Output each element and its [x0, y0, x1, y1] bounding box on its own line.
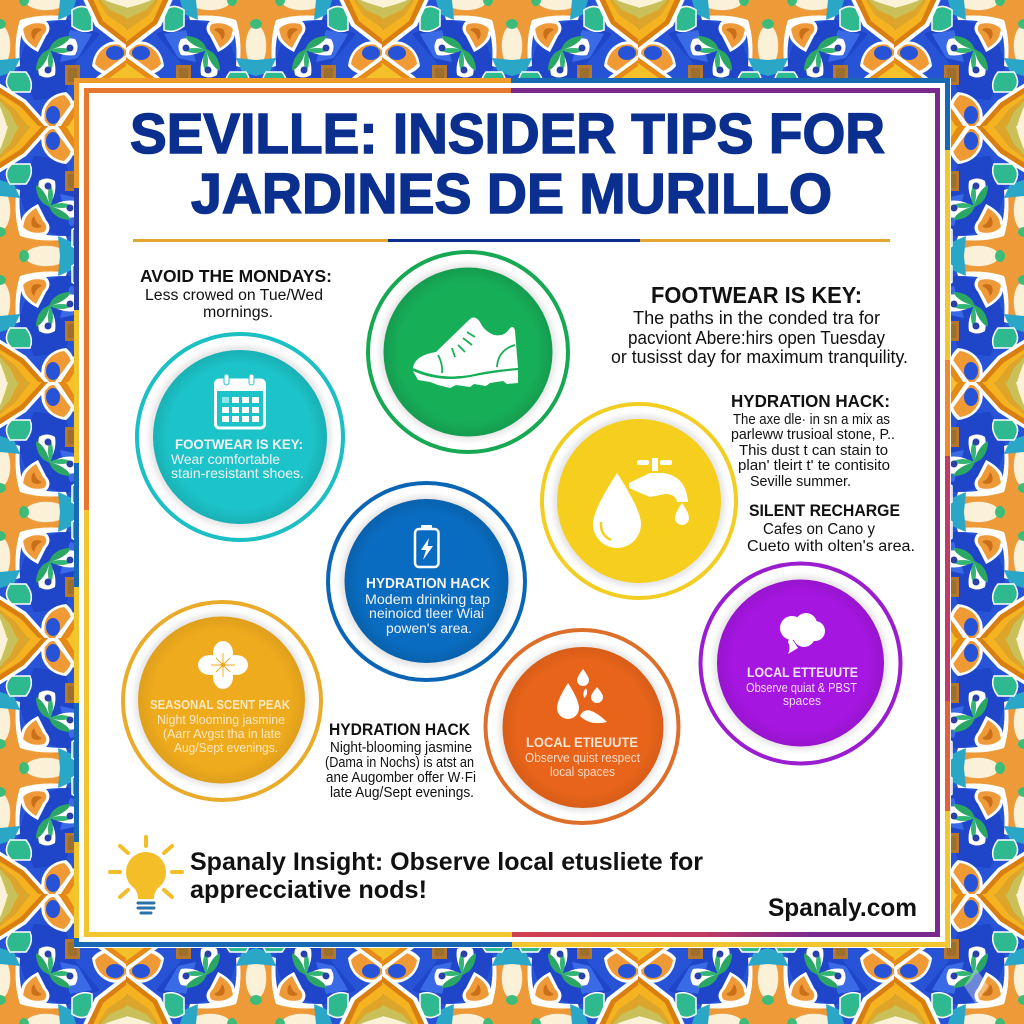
- circle: footwear teal: stain-resistant shoes.: [171, 465, 304, 481]
- circle: recharge blue: [328, 483, 525, 680]
- title: JARDINES DE MURILLO: [191, 162, 832, 226]
- icon: boot: [413, 318, 518, 388]
- text block: hydration hack right: The axe dle· in sn a mix as: [733, 412, 890, 428]
- text block: silent recharge: Cueto with olten's area.: [747, 538, 915, 555]
- circle: jasmine amber: SEASONAL SCENT PEAK: [150, 697, 291, 712]
- icon: speech bubble: [780, 613, 825, 654]
- text block: hydration hack lower: late Aug/Sept evenings.: [330, 785, 474, 801]
- circle: water yellow: [542, 404, 736, 598]
- circle: etiquette orange: local spaces: [550, 764, 615, 779]
- circle: etiquette purple: Observe quiat & PBST: [746, 680, 857, 695]
- circle: footwear teal: Wear comfortable: [171, 451, 280, 467]
- text block: silent recharge: Cafes on Cano y: [763, 521, 875, 538]
- text block: hydration hack lower: [325, 720, 476, 801]
- text block: avoid the mondays: AVOID THE MONDAYS:: [140, 266, 332, 286]
- circle: boot green: [368, 252, 568, 452]
- text block: hydration hack lower: Night-blooming jasmine: [330, 740, 472, 756]
- icon: jasmine flower: [198, 641, 248, 689]
- circle: recharge blue: powen's area.: [386, 620, 472, 636]
- text block: hydration hack right: parleww trusioal stone, P..: [731, 427, 895, 443]
- circle: etiquette orange: [486, 630, 678, 823]
- circle: etiquette purple: [700, 564, 900, 764]
- circle: jasmine amber: [123, 602, 321, 800]
- icon: light bulb: [110, 837, 182, 913]
- text block: footwear is key: [611, 282, 908, 367]
- text block: avoid the mondays: Less crowed on Tue/Wed: [145, 287, 323, 304]
- icon: battery: [415, 525, 438, 567]
- text block: hydration hack right: This dust t can stain to: [739, 443, 888, 459]
- icon: drops and leaf: [557, 669, 607, 723]
- text block: hydration hack right: plan' tleirt t' te contisito: [738, 458, 890, 474]
- text block: avoid the mondays: mornings.: [203, 304, 273, 321]
- text block: footwear is key: FOOTWEAR IS KEY:: [651, 282, 862, 308]
- title divider: [133, 239, 890, 242]
- circle: footwear teal: FOOTWEAR IS KEY:: [175, 436, 303, 452]
- title: SEVILLE: INSIDER TIPS FOR: [130, 102, 885, 166]
- icon: tap and drop: [593, 458, 689, 548]
- icon: calendar: [215, 374, 265, 428]
- circle: jasmine amber: Aug/Sept evenings.: [174, 740, 278, 755]
- insight text: [190, 848, 703, 904]
- circle: footwear teal: [137, 334, 343, 540]
- circle: etiquette orange: Observe quist respect: [525, 750, 640, 765]
- text block: footwear is key: or tusisst day for maximum tranquility.: [611, 347, 908, 367]
- circle: etiquette orange: LOCAL ETIEUUTE: [526, 734, 638, 750]
- text block: hydration hack right: HYDRATION HACK:: [731, 391, 890, 411]
- text block: hydration hack right: Seville summer.: [750, 474, 851, 490]
- text block: footwear is key: pacviont Abere:hirs open Tuesday: [628, 328, 885, 348]
- circle: jasmine amber: (Aarr Avgst tha in late: [163, 726, 281, 741]
- text block: silent recharge: [747, 501, 915, 555]
- insight text: Spanaly Insight: Observe local etusliete for: [190, 848, 703, 876]
- website: Spanaly.com: [768, 894, 917, 922]
- text block: avoid the mondays: [140, 266, 332, 321]
- watermark sparkle: [964, 968, 988, 1004]
- text block: footwear is key: The paths in the conded tra for: [633, 308, 880, 328]
- white panel with frame: [74, 78, 951, 948]
- text block: hydration hack right: [731, 391, 895, 490]
- title: [130, 102, 885, 226]
- text block: hydration hack lower: (Dama in Nochs) is atst an: [325, 755, 474, 771]
- circle: recharge blue: neinoicd tleer Wiai: [369, 605, 484, 621]
- text block: hydration hack lower: HYDRATION HACK: [329, 720, 471, 739]
- circle: etiquette purple: spaces: [783, 693, 821, 708]
- circle: recharge blue: Modem drinking tap: [365, 591, 490, 607]
- text block: hydration hack lower: ane Augomber offer W·Fi: [326, 770, 476, 786]
- circle: etiquette purple: LOCAL ETTEUUTE: [747, 664, 858, 680]
- text block: silent recharge: SILENT RECHARGE: [749, 501, 900, 520]
- insight text: apprecciative nods!: [190, 876, 427, 904]
- circle: recharge blue: HYDRATION HACK: [366, 575, 490, 592]
- circle: jasmine amber: Night 9looming jasmine: [157, 712, 285, 727]
